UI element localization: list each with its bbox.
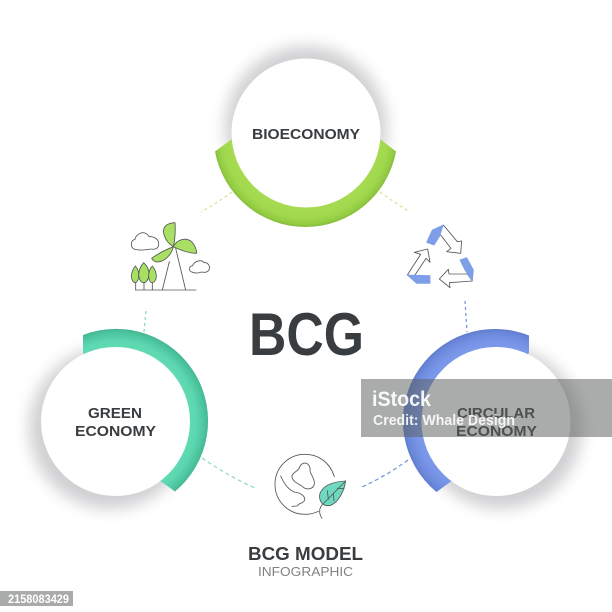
dashed connector: bioeconomy to recycle icon: [380, 192, 410, 212]
label: ECONOMY: [75, 424, 156, 440]
blue ring: [403, 329, 529, 492]
model heading: [248, 544, 363, 579]
panel: bioeconomy: [215, 46, 396, 227]
circle shadow: [420, 347, 582, 509]
watermark banner: [361, 379, 612, 437]
dashed connector: circular economy to globe icon: [362, 460, 408, 487]
lime ring: [215, 139, 396, 227]
icon: recycling arrows: [407, 225, 473, 288]
panel: circular economy: [403, 329, 582, 509]
teal ring: [83, 329, 208, 492]
dashed connector: wind icon to green economy: [144, 311, 146, 332]
dashed connector: bioeconomy to wind icon: [201, 192, 232, 212]
label: CIRCULAR: [457, 406, 536, 422]
circle shadow: [225, 46, 387, 208]
label: ECONOMY: [456, 424, 537, 440]
label: GREEN: [88, 406, 142, 422]
white circle: [41, 347, 190, 496]
tag background: [0, 591, 73, 606]
banner strip: [361, 379, 612, 437]
white circle: [232, 58, 380, 208]
icon: globe with leaf: [275, 454, 346, 518]
circle shadow: [29, 347, 191, 509]
watermark credit: Credit: Whale Design: [373, 413, 515, 429]
panel: green economy: [29, 329, 208, 509]
watermark brand: iStock: [372, 388, 431, 411]
image id tag: [0, 591, 73, 606]
label: [75, 406, 156, 440]
heading text: BCG MODEL: [248, 544, 363, 564]
title: BCG: [249, 301, 364, 368]
dashed connector: green economy to globe icon: [202, 458, 255, 488]
white circle: [422, 347, 570, 496]
icon: wind turbine with trees and clouds: [131, 223, 209, 290]
tag number: 2158083429: [8, 592, 69, 606]
dashed connector: recycle icon to circular economy: [465, 301, 467, 332]
label: BIOECONOMY: [252, 127, 360, 143]
subheading text: INFOGRAPHIC: [258, 564, 353, 579]
label: [456, 406, 537, 440]
